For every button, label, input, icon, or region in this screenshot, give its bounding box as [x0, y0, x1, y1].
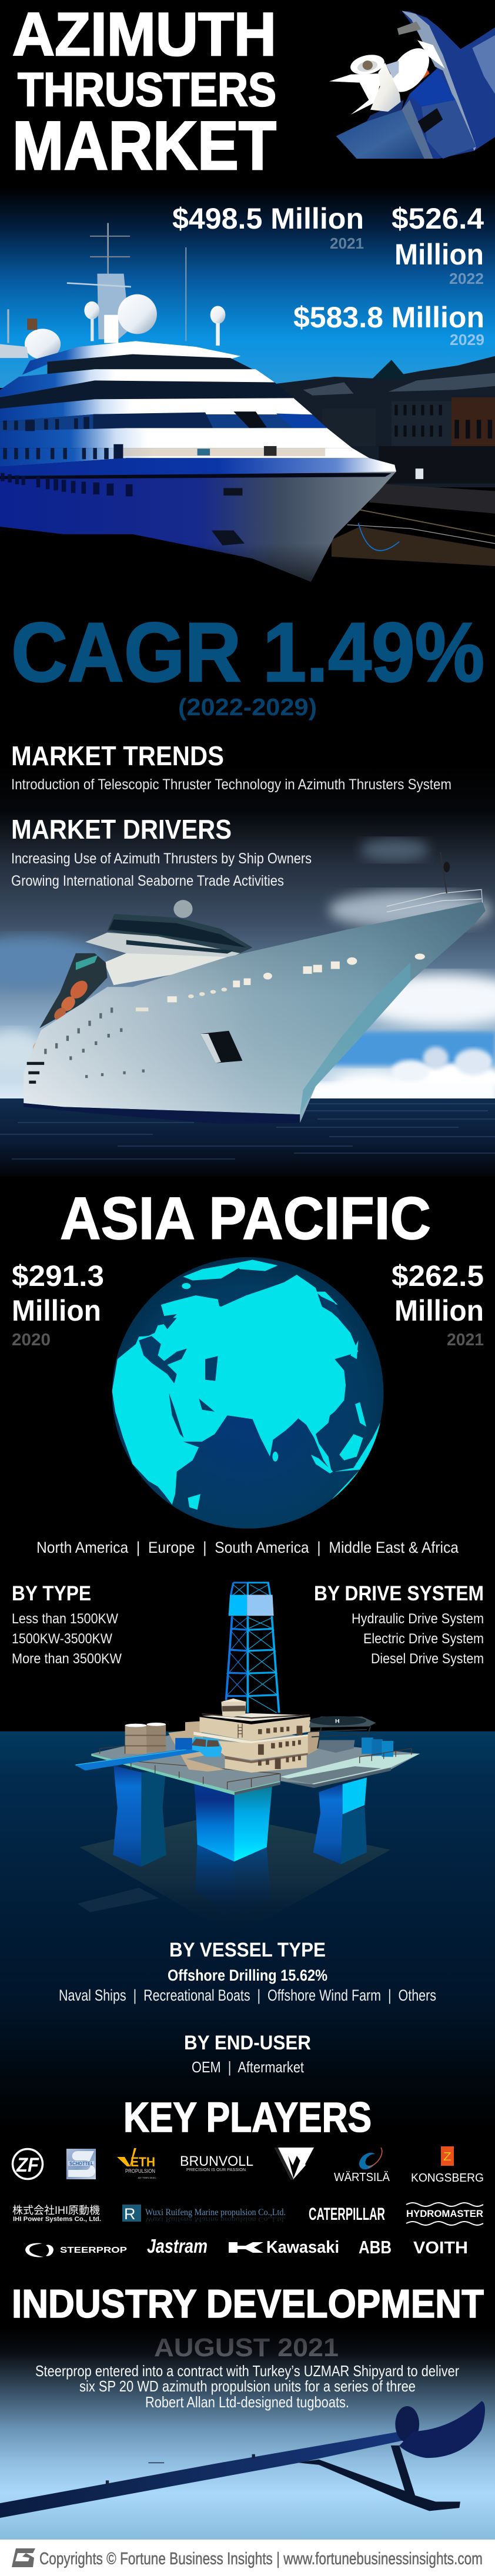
- logo: Kongsberg: [411, 2146, 484, 2185]
- logo: IHI: 株式会社IHI原動機: [12, 2205, 100, 2216]
- logo: Wuxi Ruifeng: R: [124, 2205, 135, 2223]
- logo: Hydromaster: HYDROMASTER: [406, 2208, 483, 2219]
- logo: Brunvoll: BRUNVOLL: [180, 2153, 253, 2169]
- by end-user: BY END-USER: [184, 2032, 311, 2054]
- CAGR figure: (2022-2029): [178, 694, 317, 721]
- stat: 2021 region: [392, 1259, 484, 1349]
- stat: 2022: 2022: [449, 270, 484, 287]
- logo: Thrustmaster: [275, 2148, 314, 2180]
- globe: [112, 1257, 383, 1529]
- logo: Wuxi Ruifeng: Wuxi Ruifeng Marine propulsion Co.,Ltd.: [145, 2207, 286, 2217]
- ocean band: [0, 1731, 495, 2131]
- date: AUGUST 2021: [154, 2333, 339, 2362]
- hull: [24, 852, 486, 1124]
- title: [12, 1, 276, 184]
- market trends: Introduction of Telescopic Thruster Technology in Azimuth Thrusters System: [11, 776, 451, 793]
- logo: Jastram: Jastram: [147, 2235, 208, 2257]
- background water: [0, 2327, 495, 2540]
- logo: Veth: BY TWIN DISC: [138, 2176, 156, 2179]
- stat: 2022: [392, 202, 484, 287]
- panel: regional share: [12, 1185, 484, 1556]
- logo: Brunvoll: PRECISION IS OUR PASSION: [186, 2168, 246, 2172]
- logo: Veth: PROPULSION: [125, 2168, 155, 2175]
- stat: 2029: [293, 301, 484, 349]
- logo: ZF: [13, 2149, 42, 2179]
- title: THRUSTERS: [18, 63, 276, 116]
- logo: Veth: [117, 2148, 156, 2179]
- panel: trends and drivers with cruise ship: [0, 606, 495, 1177]
- by end-user: [184, 2032, 311, 2076]
- land masses: [112, 1260, 382, 1510]
- stat: 2029: $583.8 Million: [293, 301, 484, 334]
- masts and radar domes: [0, 223, 225, 360]
- description: six SP 20 WD azimuth propulsion units for a series of three: [79, 2377, 416, 2395]
- ship hull: [0, 458, 396, 582]
- by type: 1500KW-3500KW: [12, 1631, 112, 1647]
- image: propeller shaft: [0, 2401, 485, 2518]
- by vessel type: Offshore Drilling 15.62%: [168, 1967, 327, 1984]
- stat: 2022: Million: [394, 238, 484, 271]
- logo: Wärtsilä: WÄRTSILÄ: [334, 2171, 390, 2184]
- title: MARKET: [12, 107, 276, 184]
- logo: Voith: VOITH: [413, 2239, 468, 2257]
- sky and clouds: [0, 764, 495, 1101]
- stat: 2021: 2021: [330, 235, 364, 252]
- platform topside: [75, 1583, 420, 1795]
- stat: 2021 region: $262.5: [392, 1259, 484, 1292]
- title: AZIMUTH: [12, 1, 276, 69]
- by vessel type: BY VESSEL TYPE: [169, 1939, 326, 1961]
- market drivers: MARKET DRIVERS: [11, 814, 232, 845]
- logo: Steerprop: STEERPROP: [60, 2245, 127, 2255]
- quay and pier: [332, 484, 495, 566]
- sea: [0, 1098, 495, 1177]
- description: Robert Allan Ltd-designed tugboats.: [145, 2393, 349, 2411]
- sky: [0, 188, 495, 388]
- logo: Veth: ETH: [131, 2155, 155, 2169]
- stat: 2020: 2020: [12, 1331, 51, 1349]
- stat: 2021: [172, 202, 364, 252]
- market trends: [11, 741, 451, 793]
- image: azimuth thruster: [329, 11, 495, 159]
- by type: Less than 1500KW: [12, 1611, 118, 1627]
- platform submerged pillars: [78, 1766, 390, 1937]
- by vessel type: [59, 1939, 436, 2004]
- stat: 2029: 2029: [450, 331, 484, 349]
- storage tanks: [125, 1723, 166, 1754]
- by end-user: OEM | Aftermarket: [192, 2058, 305, 2076]
- gangway crane: [75, 1737, 222, 1770]
- heading: KEY PLAYERS: [123, 2095, 372, 2141]
- logo: Kongsberg: Z: [443, 2150, 451, 2163]
- stat: 2021 region: 2021: [447, 1331, 484, 1349]
- panel: industry development: [0, 2282, 495, 2540]
- by type: More than 3500KW: [12, 1651, 122, 1667]
- inland seas: [139, 1295, 341, 1438]
- description: [35, 2362, 459, 2411]
- helideck: H: [335, 1719, 340, 1724]
- market drivers: Increasing Use of Azimuth Thrusters by Ship Owners: [11, 850, 312, 867]
- panel: key players: [12, 2095, 484, 2257]
- logo: Schottel: SCHOTTEL: [69, 2160, 93, 2166]
- ship superstructure: [0, 341, 369, 467]
- logo: ABB: ABB: [359, 2237, 392, 2257]
- stat: 2020: $291.3: [12, 1259, 104, 1292]
- stat: 2022: $526.4: [392, 202, 484, 235]
- stat: 2020: [12, 1259, 104, 1349]
- logo: Wuxi Ruifeng: [122, 2205, 286, 2224]
- logo: Wärtsilä: [334, 2148, 390, 2184]
- logo: Kawasaki: Kawasaki: [266, 2238, 339, 2257]
- by type: [12, 1582, 122, 1667]
- illustration: docked cruise ship with city: [0, 223, 495, 582]
- deck: [91, 1721, 420, 1795]
- logo: Kawasaki: [229, 2238, 339, 2257]
- logo: Kongsberg: KONGSBERG: [411, 2172, 484, 2185]
- buildings: [272, 356, 495, 487]
- by drive system: [314, 1582, 484, 1667]
- by drive system: Electric Drive System: [363, 1631, 484, 1647]
- logo: IHI: IHI Power Systems Co., Ltd.: [13, 2216, 101, 2223]
- by drive system: Hydraulic Drive System: [352, 1611, 484, 1627]
- logo: Caterpillar: CATERPILLAR: [309, 2205, 385, 2224]
- region heading: ASIA PACIFIC: [60, 1185, 431, 1252]
- market trends: MARKET TRENDS: [11, 741, 224, 771]
- logo: Schottel: [66, 2149, 96, 2179]
- logo: IHI: [12, 2205, 101, 2223]
- derrick: [226, 1583, 279, 1713]
- helideck: [309, 1716, 412, 1763]
- market drivers: Growing International Seaborne Trade Activities: [11, 873, 284, 889]
- stat: 2021 region: Million: [394, 1294, 484, 1327]
- by type: BY TYPE: [12, 1582, 91, 1605]
- logo mark: [12, 2548, 35, 2567]
- panel: header and cruise ship: [0, 1, 495, 582]
- market drivers: [11, 814, 312, 889]
- accommodation block: [168, 1699, 319, 1773]
- panel: segments with offshore platform: [0, 1582, 495, 2131]
- logo: Hydromaster: [406, 2203, 483, 2225]
- stat: 2020: Million: [12, 1294, 101, 1327]
- footer: [0, 2540, 495, 2576]
- regions list: North America | Europe | South America | Middle East & Africa: [36, 1539, 459, 1556]
- ship illustration: [24, 852, 486, 1124]
- stat: 2021: $498.5 Million: [172, 202, 364, 235]
- by drive system: Diesel Drive System: [371, 1651, 484, 1667]
- logo: ZF: ZF: [16, 2154, 39, 2176]
- logo: Wuxi Ruifeng: Wuxi Ruifeng Marine propulsion Co.,Ltd.: [145, 2216, 286, 2224]
- logo: Steerprop: [25, 2243, 127, 2257]
- upper decks: [31, 900, 253, 1053]
